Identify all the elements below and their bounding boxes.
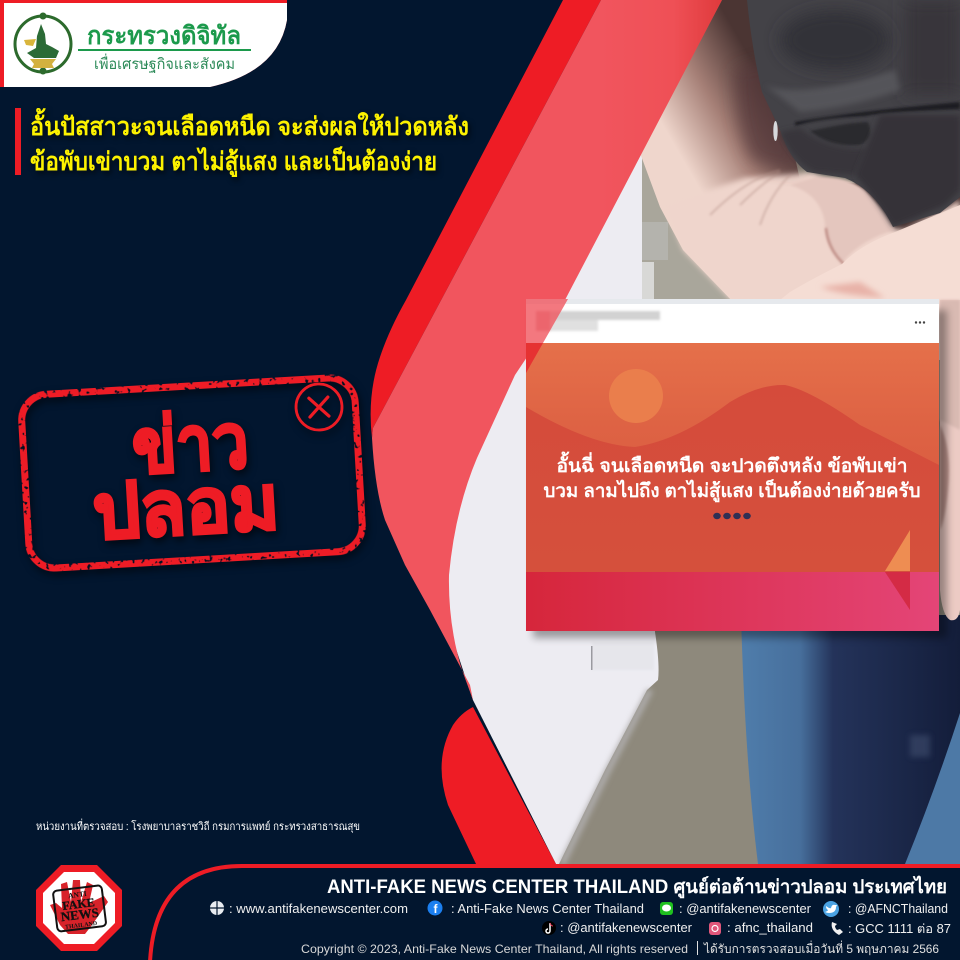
instagram account: : afnc_thailand <box>727 921 813 935</box>
badge text: THAILAND <box>65 921 98 931</box>
ministry name: กระทรวงดิจิทัล <box>87 22 241 50</box>
stamp: fake news: ปลอม <box>91 460 281 556</box>
footer panel <box>150 866 960 960</box>
verification date: ได้รับการตรวจสอบเมื่อวันที่ 5 พฤษภาคม 2566 <box>703 940 939 956</box>
pink band <box>526 572 939 631</box>
website: : www.antifakenewscenter.com <box>229 902 408 916</box>
facebook name: : Anti-Fake News Center Thailand <box>451 902 644 916</box>
icon: tiktok <box>542 921 556 935</box>
photo: dark shirt <box>747 0 960 227</box>
tiktok account: : @antifakenewscenter <box>560 921 692 935</box>
title text <box>30 107 469 178</box>
logo panel: ministry <box>0 0 287 87</box>
emoji row <box>713 513 751 519</box>
icon: cross circle <box>295 383 343 431</box>
footer heading: ANTI-FAKE NEWS CENTER THAILAND ศูนย์ต่อต้านข่าวปลอม ประเทศไทย <box>327 875 947 899</box>
icon: facebook: f <box>434 902 438 916</box>
stamp text: ข่าว <box>130 399 251 490</box>
copyright: Copyright © 2023, Anti-Fake News Center Thailand, All rights reserved <box>301 942 688 956</box>
badge: anti fake news <box>36 865 122 951</box>
title block <box>15 107 469 178</box>
stamp: fake news <box>20 377 364 569</box>
photo: arm and hand <box>640 0 960 620</box>
source note: หน่วยงานที่ตรวจสอบ : โรงพยาบาลราชวิถี กรมการแพทย์ กระทรวงสาธารณสุข <box>36 818 360 833</box>
icon: twitter <box>823 901 839 917</box>
red rounded shape bottom <box>442 707 556 864</box>
photo: jeans <box>741 615 960 864</box>
photo: white toilet <box>448 155 659 864</box>
panel: fake post card <box>526 299 947 638</box>
badge text: ANTI <box>67 889 87 900</box>
hotline: : GCC 1111 ต่อ 87 <box>848 922 951 936</box>
icon: globe <box>210 901 224 915</box>
title text: ข้อพับเข่าบวม ตาไม่สู้แสง และเป็นต้องง่าย <box>30 146 437 178</box>
panel: fake post card: บวม ลามไปถึง ตาไม่สู้แสง เป็นต้องง่ายด้วยครับ <box>544 478 920 503</box>
translucent pink band <box>372 0 722 700</box>
twitter account: : @AFNCThailand <box>848 902 948 916</box>
icon: facebook <box>428 900 442 916</box>
title text: อั้นปัสสาวะจนเลือดหนืด จะส่งผลให้ปวดหลัง <box>30 107 469 141</box>
orange triangle <box>885 530 910 571</box>
icon: ministry emblem <box>15 12 71 74</box>
post text: อั้นฉี่ จนเลือดหนืด จะปวดตึงหลัง ข้อพับเข่า <box>556 451 908 477</box>
line account: : @antifakenewscenter <box>679 902 811 916</box>
sun <box>609 369 663 423</box>
icon: phone <box>832 922 843 935</box>
post background <box>526 343 939 572</box>
mountain <box>526 385 939 572</box>
photo: person holding abdomen <box>400 0 960 864</box>
pink overlap on card corner <box>526 299 568 343</box>
icon: red hand <box>50 880 108 934</box>
menu dots <box>915 321 925 324</box>
blurred account name <box>536 311 660 331</box>
ministry tagline: เพื่อเศรษฐกิจและสังคม <box>94 53 235 73</box>
icon: line <box>660 902 673 915</box>
badge text: FAKE <box>62 895 95 913</box>
icon: instagram <box>709 922 721 935</box>
badge text: NEWS <box>60 905 100 924</box>
red chevron band <box>371 0 601 438</box>
badge text <box>53 885 106 932</box>
